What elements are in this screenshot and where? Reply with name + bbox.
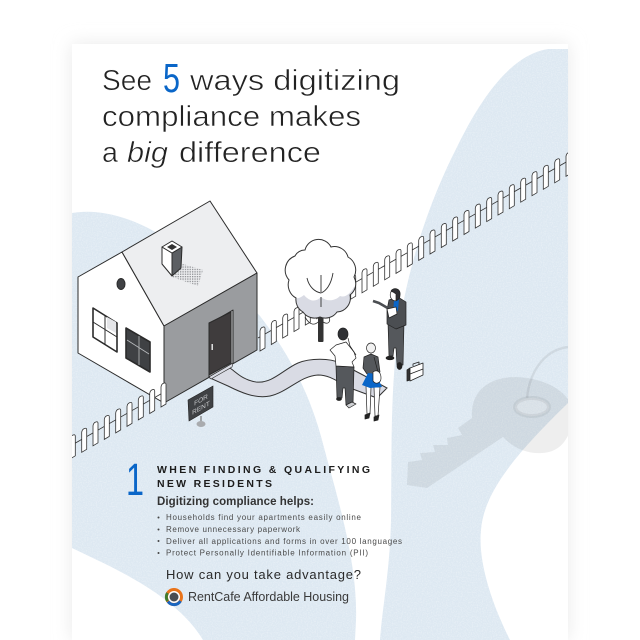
house — [78, 201, 257, 403]
person: man in suit with paper — [373, 289, 406, 370]
page backdrop shadow — [72, 44, 568, 640]
bullet list: Deliver all applications and forms in over 100 languages — [166, 537, 402, 546]
section heading: WHEN FINDING & QUALIFYING — [157, 464, 370, 476]
roof — [122, 201, 257, 326]
upper right picket fence — [258, 152, 571, 351]
bullet list — [158, 513, 402, 558]
title: See — [102, 65, 152, 97]
window right — [126, 328, 150, 372]
person: woman in blue skirt — [362, 343, 382, 421]
title: big — [127, 137, 168, 169]
bullet list: Households find your apartments easily online — [166, 513, 362, 522]
lower left picket fence — [70, 383, 166, 459]
section heading: NEW RESIDENTS — [157, 478, 272, 490]
title: ways digitizing — [189, 65, 400, 97]
title: compliance makes — [102, 101, 361, 133]
title — [102, 55, 400, 169]
key shadow — [407, 347, 574, 488]
chimney — [162, 241, 182, 276]
call to action: How can you take advantage? — [166, 567, 361, 582]
section heading — [157, 464, 370, 490]
bullet list: Protect Personally Identifiable Information (PII) — [166, 548, 368, 558]
title: 5 — [163, 55, 180, 101]
door — [209, 310, 233, 379]
for rent sign: FOR — [194, 394, 208, 408]
window left — [93, 308, 117, 352]
for rent sign — [188, 386, 213, 427]
winding garden path — [210, 359, 387, 398]
tree — [285, 239, 360, 342]
logo wordmark: RentCafe Affordable Housing — [188, 590, 349, 604]
bullet list: Remove unnecessary paperwork — [166, 525, 301, 534]
title: difference — [179, 137, 321, 169]
briefcase — [407, 362, 423, 381]
title: a — [102, 137, 119, 169]
left wall with gable — [78, 252, 164, 403]
chimney shadow — [172, 264, 203, 286]
round vent — [117, 278, 125, 290]
for rent sign: RENT — [192, 400, 211, 417]
pale blue background shapes — [72, 49, 568, 640]
logo: RentCafe — [165, 588, 183, 606]
subheading: Digitizing compliance helps: — [157, 496, 314, 508]
person: man on phone — [330, 328, 356, 408]
white poster card — [72, 44, 568, 640]
right wall — [164, 273, 257, 403]
section number: 1 — [126, 454, 144, 505]
